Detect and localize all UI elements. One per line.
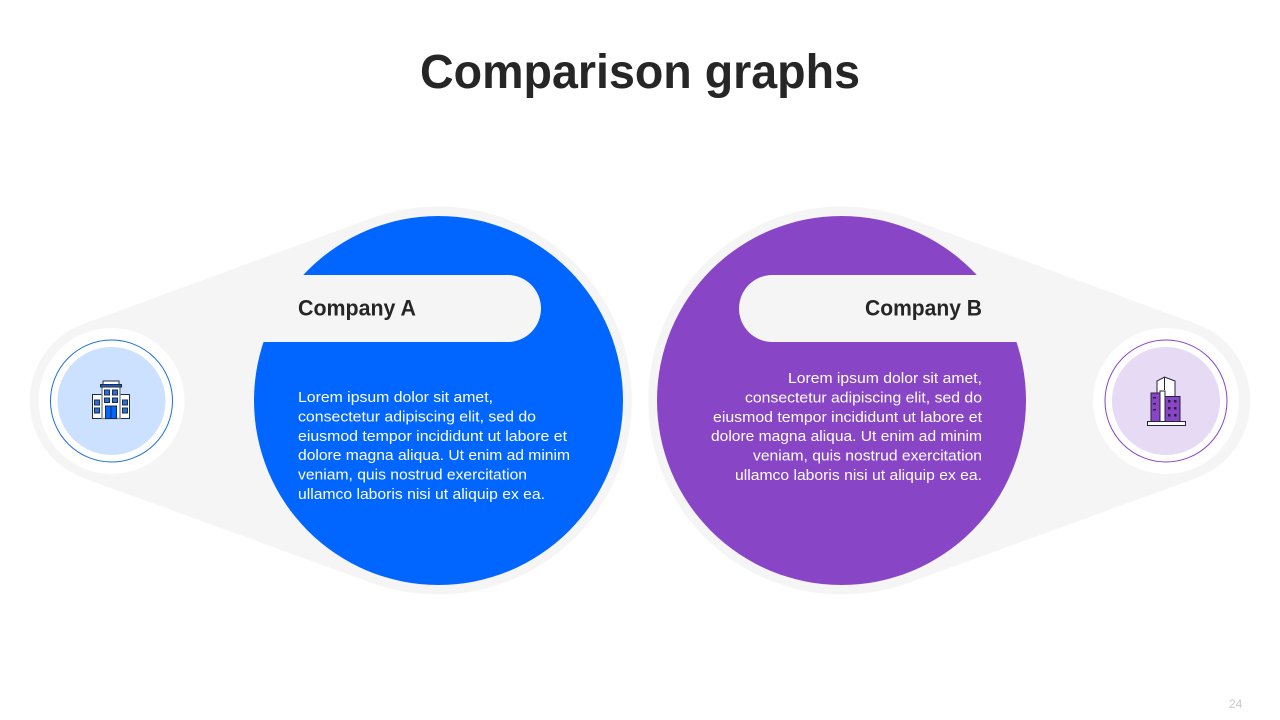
page number: 24 [1229, 697, 1243, 711]
heading: Company B: Company B [865, 296, 982, 320]
body text A: veniam, quis nostrud exercitation [298, 467, 527, 484]
heading: Company A: Company A [298, 296, 416, 320]
body text B: veniam, quis nostrud exercitation [753, 448, 982, 465]
teardrop backing shape A [30, 206, 632, 595]
body text A: ullamco laboris nisi ut aliquip ex ea. [298, 486, 545, 503]
title: Comparison graphs [420, 46, 860, 99]
icon: office building [92, 381, 130, 418]
body text A: consectetur adipiscing elit, sed do [298, 408, 536, 425]
teardrop backing shape B [648, 207, 1250, 595]
blue circle A [254, 216, 623, 585]
purple circle B [657, 216, 1026, 585]
body text B [711, 370, 983, 484]
body text B: ullamco laboris nisi ut aliquip ex ea. [735, 467, 982, 484]
body text B: dolore magna aliqua. Ut enim ad minim [711, 428, 982, 445]
body text B: eiusmod tempor incididunt ut labore et [713, 409, 983, 426]
heading pill A [230, 275, 541, 342]
icon windows [1153, 397, 1176, 416]
badge A [38, 328, 184, 474]
body text B: Lorem ipsum dolor sit amet, [788, 370, 982, 387]
heading pill B [739, 275, 1050, 342]
panel: Company A [30, 206, 632, 595]
body text A [298, 389, 570, 503]
panel: Company B [648, 207, 1250, 595]
body text A: dolore magna aliqua. Ut enim ad minim [298, 447, 570, 464]
body text A: Lorem ipsum dolor sit amet, [298, 389, 493, 406]
icon: city towers [1148, 377, 1186, 426]
badge B [1093, 328, 1239, 474]
body text A: eiusmod tempor incididunt ut labore et [298, 428, 568, 445]
body text B: consectetur adipiscing elit, sed do [745, 389, 982, 406]
